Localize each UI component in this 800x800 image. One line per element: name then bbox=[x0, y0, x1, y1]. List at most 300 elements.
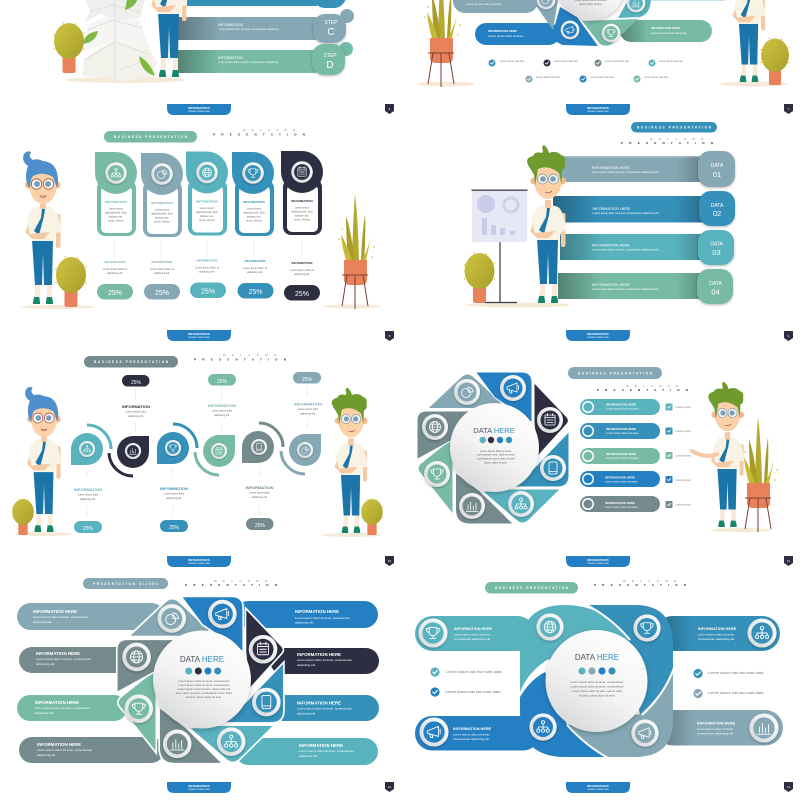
bar left 3: adipiscing elit. bbox=[35, 711, 54, 715]
bar top left bbox=[415, 616, 535, 651]
welcome heading: PRESENTATION bbox=[594, 583, 687, 587]
step 3 blue: INFORMATION bbox=[160, 486, 188, 491]
card 1 bbox=[95, 152, 137, 300]
bar left 2: INFORMATION HERE bbox=[36, 651, 80, 656]
info bar blue: INFORMATION HERE bbox=[488, 29, 517, 33]
welcome heading: WELCOME bbox=[214, 579, 267, 583]
page number: 13 bbox=[787, 785, 790, 789]
heading pill: BUSINESS PRESENTATION bbox=[94, 360, 169, 364]
footer tab bbox=[566, 782, 630, 793]
data badge 02 bbox=[699, 191, 735, 226]
center paragraph: Lorem ipsum dolor sit ame. Ipsum dolor sit bbox=[178, 687, 231, 691]
petal teal bbox=[189, 725, 275, 763]
card 1: INFORMATION bbox=[105, 260, 125, 264]
card 5: adipiscing elit. bbox=[294, 273, 310, 276]
data bar 02 bbox=[553, 196, 705, 222]
card 1: tristique nec, bbox=[109, 216, 123, 218]
data badge 03: 03 bbox=[712, 248, 721, 257]
footer tab: BUSINESS COMPANY HERE bbox=[188, 562, 210, 565]
bar right 4: adipiscing elit. bbox=[299, 754, 318, 758]
footer tab bbox=[167, 556, 231, 567]
step 4 green: Lorem ipsum dolor bbox=[212, 410, 233, 412]
page number: 12 bbox=[388, 785, 391, 789]
bar top right bbox=[655, 616, 780, 651]
swirl gaps bbox=[519, 604, 674, 758]
card 2: 25% bbox=[155, 290, 169, 297]
footer tab: BUSINESS COMPANY HERE bbox=[587, 336, 609, 339]
data badge 04: 04 bbox=[711, 288, 720, 296]
center paragraph bbox=[176, 679, 232, 699]
petal teal bbox=[520, 605, 630, 692]
welcome heading bbox=[621, 137, 714, 145]
step C badge bbox=[313, 9, 354, 43]
center paragraph: ipsum dolor sit ame. bbox=[484, 460, 508, 464]
list row 5: INFORMATION HERE bbox=[605, 501, 635, 505]
list row 5: Lorem ipsum bbox=[676, 502, 692, 506]
plant bbox=[741, 417, 778, 532]
welcome heading: WELCOME bbox=[243, 128, 295, 132]
bar left 4: INFORMATION HERE bbox=[37, 742, 81, 747]
card 4: INFORMATION bbox=[245, 259, 265, 263]
slide 9: data bars with board bbox=[464, 122, 793, 341]
ground shadow bbox=[710, 528, 772, 532]
petal grey-blue bbox=[567, 672, 673, 757]
center paragraph: Lorem ipsum dolor sit amet, bbox=[480, 449, 512, 453]
footer tab: BUSINESS COMPANY HERE bbox=[587, 110, 609, 113]
bar top right: consectetuer adipiscing elit. bbox=[698, 637, 735, 641]
bar left 4: adipiscing elit. bbox=[37, 753, 56, 757]
data badge 02: 02 bbox=[713, 209, 721, 218]
petal grey upper bbox=[117, 639, 196, 693]
info bar grey: Lorem ipsum dolor sit amet, bbox=[466, 2, 502, 6]
icon buttons bbox=[422, 375, 566, 519]
step 2 navy bbox=[109, 375, 150, 476]
card 5: INFORMATION bbox=[291, 199, 314, 203]
character bbox=[731, 0, 766, 82]
card 4: purus. Viverra bbox=[246, 220, 262, 222]
card 5: Lorem ipsum bbox=[295, 206, 309, 210]
footer tab: INFOGRAPHICS bbox=[587, 106, 609, 110]
bar left 4: Lorem ipsum dolor sit amet, consectetuer bbox=[37, 748, 92, 752]
bar top right: INFORMATION HERE bbox=[698, 627, 737, 631]
welcome heading bbox=[594, 579, 687, 587]
heading pill bbox=[104, 131, 197, 142]
step 2 navy: adipiscing elit. bbox=[128, 415, 144, 418]
page number bbox=[385, 104, 394, 114]
footer tab: BUSINESS COMPANY HERE bbox=[587, 788, 609, 791]
heading pill: BUSINESS PRESENTATION bbox=[114, 135, 188, 139]
center paragraph: sit ame. ipsum dolor sit ame. bbox=[186, 695, 222, 699]
step bar D: INFORMATION bbox=[218, 56, 243, 60]
step 2 navy: Lorem ipsum dolor bbox=[126, 410, 147, 414]
checklist: Lorem Ipsum has two bbox=[536, 76, 561, 79]
step 3 blue bbox=[157, 424, 197, 532]
welcome heading: PRESENTATION bbox=[597, 388, 689, 392]
faint top bar bbox=[650, 0, 725, 1]
checklist left: Lorem Ipsum has two main data bbox=[445, 689, 501, 694]
paper stack bbox=[82, 0, 157, 81]
icon buttons bbox=[537, 0, 645, 42]
money leaves bbox=[83, 0, 155, 76]
data bar 01: INFORMATION HERE bbox=[592, 166, 630, 170]
step 5 grey: INFORMATION bbox=[246, 485, 274, 490]
plant bbox=[338, 194, 375, 309]
cactus right bbox=[361, 498, 383, 535]
bar right 4: Lorem ipsum dolor sit amet, consectetuer bbox=[299, 749, 354, 753]
card 1: purus. Viverra bbox=[108, 220, 124, 222]
data bar 04 bbox=[558, 273, 705, 299]
data badge 01 bbox=[698, 151, 735, 187]
card 4: tristique nec, bbox=[247, 216, 261, 218]
center paragraph bbox=[570, 680, 624, 698]
cactus bbox=[55, 256, 87, 307]
step 6 grey-blue: INFORMATION bbox=[294, 402, 322, 406]
bar top left: Lorem ipsum dolor sit amet, bbox=[454, 632, 491, 636]
checklist: Lorem Ipsum has two bbox=[500, 60, 525, 63]
card 4: Lorem ipsum dolor sit bbox=[243, 267, 267, 270]
welcome heading: WELCOME bbox=[650, 137, 703, 141]
checklist: Lorem Ipsum has two bbox=[605, 60, 630, 63]
checklist: Lorem Ipsum has two bbox=[590, 76, 615, 79]
page number: 7 bbox=[788, 107, 790, 111]
bar bottom right: consectetuer adipiscing elit. bbox=[697, 732, 734, 736]
card 2: INFORMATION bbox=[152, 260, 172, 264]
bar left 3: INFORMATION HERE bbox=[35, 700, 79, 705]
page number: 8 bbox=[389, 334, 391, 338]
petal grey lower bbox=[159, 707, 223, 764]
step 3 blue: adipiscing elit. bbox=[166, 497, 182, 500]
center dots bbox=[480, 437, 512, 443]
footer tab: INFOGRAPHICS bbox=[587, 784, 609, 788]
list row 3: INFORMATION HERE bbox=[606, 452, 636, 456]
ground shadows bbox=[417, 82, 788, 86]
cactus bbox=[760, 38, 790, 85]
bar bottom right bbox=[655, 710, 783, 746]
card 4: Lorem ipsum bbox=[247, 208, 261, 210]
slide 10: timeline bbox=[12, 353, 394, 567]
bar right 4: INFORMATION HERE bbox=[299, 743, 343, 748]
list row 4 bbox=[580, 471, 692, 487]
heading pill: BUSINESS PRESENTATION bbox=[578, 371, 653, 375]
footer tab: INFOGRAPHICS bbox=[188, 106, 210, 110]
checklist: Lorem Ipsum has two bbox=[659, 60, 684, 63]
heading pill bbox=[84, 356, 178, 368]
bar right 4 bbox=[235, 738, 378, 765]
step 4 green: 25% bbox=[217, 379, 228, 385]
ground shadows bbox=[14, 532, 382, 537]
bar right 3: adipiscing elit. bbox=[297, 712, 316, 716]
page number bbox=[784, 331, 793, 341]
card 1: adipiscing elit. bbox=[107, 272, 123, 275]
character left bbox=[25, 387, 61, 532]
petal grey upper bbox=[417, 411, 490, 460]
checklist: Lorem Ipsum has two bbox=[644, 76, 669, 79]
footer tab bbox=[566, 104, 630, 115]
data bar 04: Lorem ipsum dolor sit amet, consectetuer adipiscing elit. bbox=[592, 287, 659, 291]
page number bbox=[385, 556, 394, 566]
bar left 1 bbox=[17, 603, 165, 630]
step 1 teal bbox=[71, 425, 111, 533]
page number: 11 bbox=[787, 559, 790, 563]
list row 2: Lorem ipsum bbox=[676, 429, 692, 433]
bar bottom left: Lorem ipsum dolor sit amet, bbox=[453, 732, 490, 736]
petal navy bbox=[534, 382, 568, 456]
heading pill: BUSINESS PRESENTATION bbox=[495, 586, 569, 590]
card 5: adipiscing elit. Duis bbox=[291, 210, 313, 214]
bar bottom left: consectetuer adipiscing elit. bbox=[453, 737, 490, 741]
step 6 grey-blue: 25% bbox=[302, 377, 313, 383]
slide 6: steps with paper stack bbox=[53, 0, 394, 115]
data bar 03 bbox=[560, 234, 705, 260]
footer tab: INFOGRAPHICS bbox=[188, 784, 210, 788]
list row 1: INFORMATION HERE bbox=[606, 402, 636, 406]
center paragraph: Lorem ipsum dolor sit amet, consectetuer bbox=[570, 684, 624, 688]
bar top left: consectetuer adipiscing elit. bbox=[454, 637, 491, 641]
step bar C: Lorem ipsum dolor sit amet, consectetuer adipiscing bbox=[219, 27, 279, 31]
bar left 4 bbox=[19, 737, 164, 763]
card 4: 25% bbox=[248, 289, 263, 296]
info bar blue bbox=[475, 23, 560, 45]
center disc bbox=[450, 403, 539, 492]
checklist right: Lorem Ipsum has two main data bbox=[708, 670, 764, 675]
step 3 blue: 25% bbox=[169, 525, 180, 531]
welcome heading bbox=[213, 128, 306, 136]
step 5 grey: 25% bbox=[255, 523, 266, 529]
card 2: adipiscing elit. Duis bbox=[151, 212, 173, 216]
welcome heading: PRESENTATION bbox=[621, 141, 714, 145]
card 5: tristique nec, bbox=[295, 214, 309, 218]
page number: 9 bbox=[788, 334, 790, 338]
footer tab bbox=[167, 104, 231, 115]
step 1 teal: 25% bbox=[83, 526, 94, 532]
card 4: INFORMATION bbox=[243, 200, 266, 204]
card 4: adipiscing elit. bbox=[247, 271, 263, 274]
card 1: 25% bbox=[108, 290, 122, 297]
center dots bbox=[185, 668, 221, 674]
card 3: INFORMATION bbox=[196, 200, 219, 204]
info bar green: Lorem ipsum dolor sit amet, bbox=[651, 31, 687, 35]
card 5: purus. Viverra bbox=[294, 218, 310, 222]
petal teal-blue bbox=[514, 432, 569, 487]
slide 13: swirl diagram bbox=[415, 579, 793, 793]
ground shadow bbox=[65, 77, 185, 83]
heading pill bbox=[631, 122, 717, 132]
bar bottom left bbox=[415, 716, 540, 750]
step 1 teal: INFORMATION bbox=[74, 487, 102, 492]
step D badge: D bbox=[326, 60, 334, 71]
heading pill: BUSINESS PRESENTATION bbox=[637, 126, 712, 130]
petal grey-blue bbox=[428, 374, 502, 408]
cactus bbox=[53, 22, 85, 73]
footer tab: BUSINESS COMPANY HERE bbox=[188, 110, 210, 113]
card 4 bbox=[232, 152, 274, 298]
icon buttons bbox=[122, 600, 281, 758]
card 3: tristique nec, bbox=[200, 215, 214, 218]
card 3: adipiscing elit. bbox=[199, 270, 215, 274]
bar right 2: adipiscing elit. bbox=[297, 663, 316, 667]
bar top right: Lorem ipsum dolor sit amet, bbox=[698, 632, 735, 636]
ground shadows bbox=[21, 304, 381, 309]
bar right 2: Lorem ipsum dolor sit amet, consectetuer bbox=[297, 658, 352, 662]
checklist bbox=[488, 60, 684, 82]
list row 2 bbox=[580, 423, 692, 439]
center paragraph: ame. dolor sit amet, consectetuer lorem dolor bbox=[176, 691, 232, 695]
bar left 1: adipiscing elit. bbox=[33, 620, 52, 624]
center paragraph: Lorem ipsum dolor sit amet, consectetuer bbox=[178, 679, 230, 683]
bar right 3 bbox=[270, 695, 379, 721]
center title: DATA HERE bbox=[473, 426, 515, 435]
petal grey bbox=[532, 0, 558, 30]
heading pill bbox=[83, 578, 168, 589]
welcome heading bbox=[194, 353, 287, 362]
info bar grey bbox=[453, 0, 538, 13]
step 6 grey-blue: Lorem ipsum dolor bbox=[298, 408, 319, 411]
data badge 01: 01 bbox=[713, 170, 721, 179]
card 3: adipiscing elit. Duis bbox=[196, 211, 218, 214]
center paragraph: sit ame. ipsum dolor sit ame. bbox=[579, 694, 616, 698]
card 5 bbox=[281, 151, 323, 300]
bar left 2 bbox=[19, 647, 129, 673]
info bar green: INFORMATION HERE bbox=[651, 26, 680, 30]
step 5 grey: adipiscing elit. bbox=[252, 496, 268, 499]
checklist: Lorem Ipsum has two bbox=[554, 60, 579, 63]
bar icons bbox=[418, 618, 779, 747]
bar right 1: INFORMATION HERE bbox=[295, 609, 339, 614]
card 2: Lorem ipsum dolor sit bbox=[150, 268, 174, 271]
step 4 green bbox=[195, 374, 236, 475]
data bar 02: Lorem ipsum dolor sit amet, consectetuer adipiscing elit. bbox=[592, 211, 660, 215]
bar top left: INFORMATION HERE bbox=[454, 627, 493, 631]
petal grey-blue bbox=[128, 599, 211, 637]
list row 5 bbox=[580, 496, 692, 512]
plant bbox=[424, 0, 461, 87]
heading pill bbox=[568, 367, 662, 379]
checklist right bbox=[693, 669, 764, 698]
pointing arm bbox=[692, 451, 717, 456]
step 6 grey-blue bbox=[281, 372, 322, 474]
bar left 2: Lorem ipsum dolor sit amet, consectetuer bbox=[36, 657, 91, 661]
page number bbox=[784, 104, 793, 114]
list row 4: INFORMATION HERE bbox=[605, 476, 635, 480]
step bar C bbox=[178, 17, 316, 40]
card 3: purus. Viverra bbox=[199, 219, 215, 222]
card 3: Lorem ipsum dolor sit bbox=[195, 266, 219, 270]
petal bright blue bbox=[520, 672, 605, 757]
petal green bbox=[582, 19, 638, 46]
data bar 01 bbox=[560, 156, 705, 182]
center paragraph: Lorem ipsum dolor sit amet, consectetuer bbox=[178, 683, 230, 687]
footer tab: BUSINESS COMPANY HERE bbox=[188, 788, 210, 791]
footer tab: INFOGRAPHICS bbox=[587, 558, 609, 562]
footer tab: INFOGRAPHICS bbox=[188, 332, 210, 336]
cactus bbox=[464, 252, 495, 303]
list row 5: Lorem ipsum dolor sit amet, bbox=[605, 505, 638, 509]
list row 2: Lorem ipsum dolor sit amet, bbox=[606, 431, 639, 435]
character right bbox=[332, 388, 368, 533]
welcome heading: WELCOME bbox=[223, 353, 276, 357]
card 4: adipiscing elit. Duis bbox=[243, 212, 265, 214]
card 1: Lorem ipsum bbox=[109, 208, 123, 210]
checklist left: Lorem Ipsum has two main data bbox=[446, 669, 502, 674]
petal blue bbox=[181, 596, 243, 652]
data bar 03: Lorem ipsum dolor sit amet, consectetuer adipiscing elit. bbox=[592, 248, 659, 252]
petal icons bbox=[529, 613, 661, 747]
slide 11: octagon diagram with list bbox=[417, 367, 793, 567]
footer tab bbox=[566, 556, 630, 567]
octagon diagram bbox=[417, 372, 569, 524]
step bar D: Lorem ipsum dolor sit amet, consectetuer adipiscing bbox=[218, 60, 278, 64]
step 4 green: adipiscing elit. bbox=[214, 414, 230, 417]
data badge 02: DATA bbox=[711, 203, 724, 209]
center paragraph: consectetuer ame. dolor sit amet, bbox=[477, 453, 515, 457]
page number bbox=[385, 331, 394, 341]
petal teal bbox=[482, 489, 560, 523]
data badge 01: DATA bbox=[711, 163, 724, 169]
step B badge bbox=[313, 0, 346, 8]
footer tab: INFOGRAPHICS bbox=[188, 558, 210, 562]
info bar blue: Lorem ipsum dolor sit amet, bbox=[488, 34, 524, 38]
center paragraph bbox=[477, 449, 515, 464]
petal blue bbox=[476, 372, 532, 422]
bar right 1: Lorem ipsum dolor sit amet, consectetuer bbox=[295, 616, 350, 620]
step bar C: INFORMATION bbox=[218, 23, 243, 27]
card 3: 25% bbox=[201, 288, 215, 296]
list row 3: Lorem ipsum dolor sit amet, bbox=[606, 456, 639, 460]
data bar 03: INFORMATION HERE bbox=[592, 244, 630, 248]
bar left 1: INFORMATION HERE bbox=[33, 609, 77, 614]
page number: 6 bbox=[389, 107, 391, 111]
bar bottom right: INFORMATION HERE bbox=[697, 722, 736, 726]
page number bbox=[385, 782, 394, 792]
petal green bbox=[118, 668, 156, 753]
step 6 grey-blue: adipiscing elit. bbox=[300, 412, 316, 416]
card 2: Lorem ipsum bbox=[155, 208, 169, 212]
list row 1: Lorem ipsum dolor sit amet, bbox=[606, 406, 639, 410]
welcome heading: PRESENTATION bbox=[185, 583, 278, 587]
card 2 bbox=[141, 153, 183, 300]
welcome heading: PRESENTATION bbox=[213, 132, 306, 136]
data bar 01: Lorem ipsum dolor sit amet, consectetuer adipiscing elit. bbox=[592, 170, 659, 174]
welcome heading: WELCOME bbox=[623, 579, 676, 583]
petal navy bbox=[245, 608, 283, 689]
list row 1: Lorem ipsum bbox=[676, 405, 692, 409]
bar left 3: Lorem ipsum dolor sit amet, consectetuer bbox=[35, 706, 90, 710]
slide 8: five cards bbox=[21, 128, 394, 341]
page number: 10 bbox=[388, 559, 391, 563]
card 5: Lorem ipsum dolor sit bbox=[290, 269, 314, 272]
step 3 blue: Lorem ipsum dolor bbox=[164, 492, 185, 496]
center title: DATA HERE bbox=[575, 653, 619, 662]
center paragraph: Lorem ipsum dolor sit amet, consectetuer bbox=[570, 680, 624, 684]
step 1 teal: adipiscing elit. bbox=[80, 498, 96, 501]
step 2 navy: 25% bbox=[131, 380, 142, 386]
step 1 teal: Lorem ipsum dolor bbox=[78, 494, 99, 496]
footer tab bbox=[167, 330, 231, 341]
character bbox=[708, 382, 744, 527]
card 1: Lorem ipsum dolor sit bbox=[103, 268, 127, 271]
checklist left bbox=[430, 667, 502, 697]
center disc bbox=[557, 0, 625, 20]
center paragraph: Lorem ipsum dolor sit ame. Ipsum dolor bbox=[572, 689, 622, 693]
card 2: INFORMATION bbox=[151, 201, 174, 205]
data bar 02: INFORMATION HERE bbox=[592, 207, 631, 211]
step D badge bbox=[312, 42, 353, 75]
bar left 3 bbox=[17, 695, 127, 721]
data badge 04: DATA bbox=[709, 281, 722, 287]
welcome heading: WELCOME bbox=[626, 384, 678, 388]
presentation board bbox=[472, 190, 528, 302]
step D badge: STEP bbox=[323, 53, 337, 59]
